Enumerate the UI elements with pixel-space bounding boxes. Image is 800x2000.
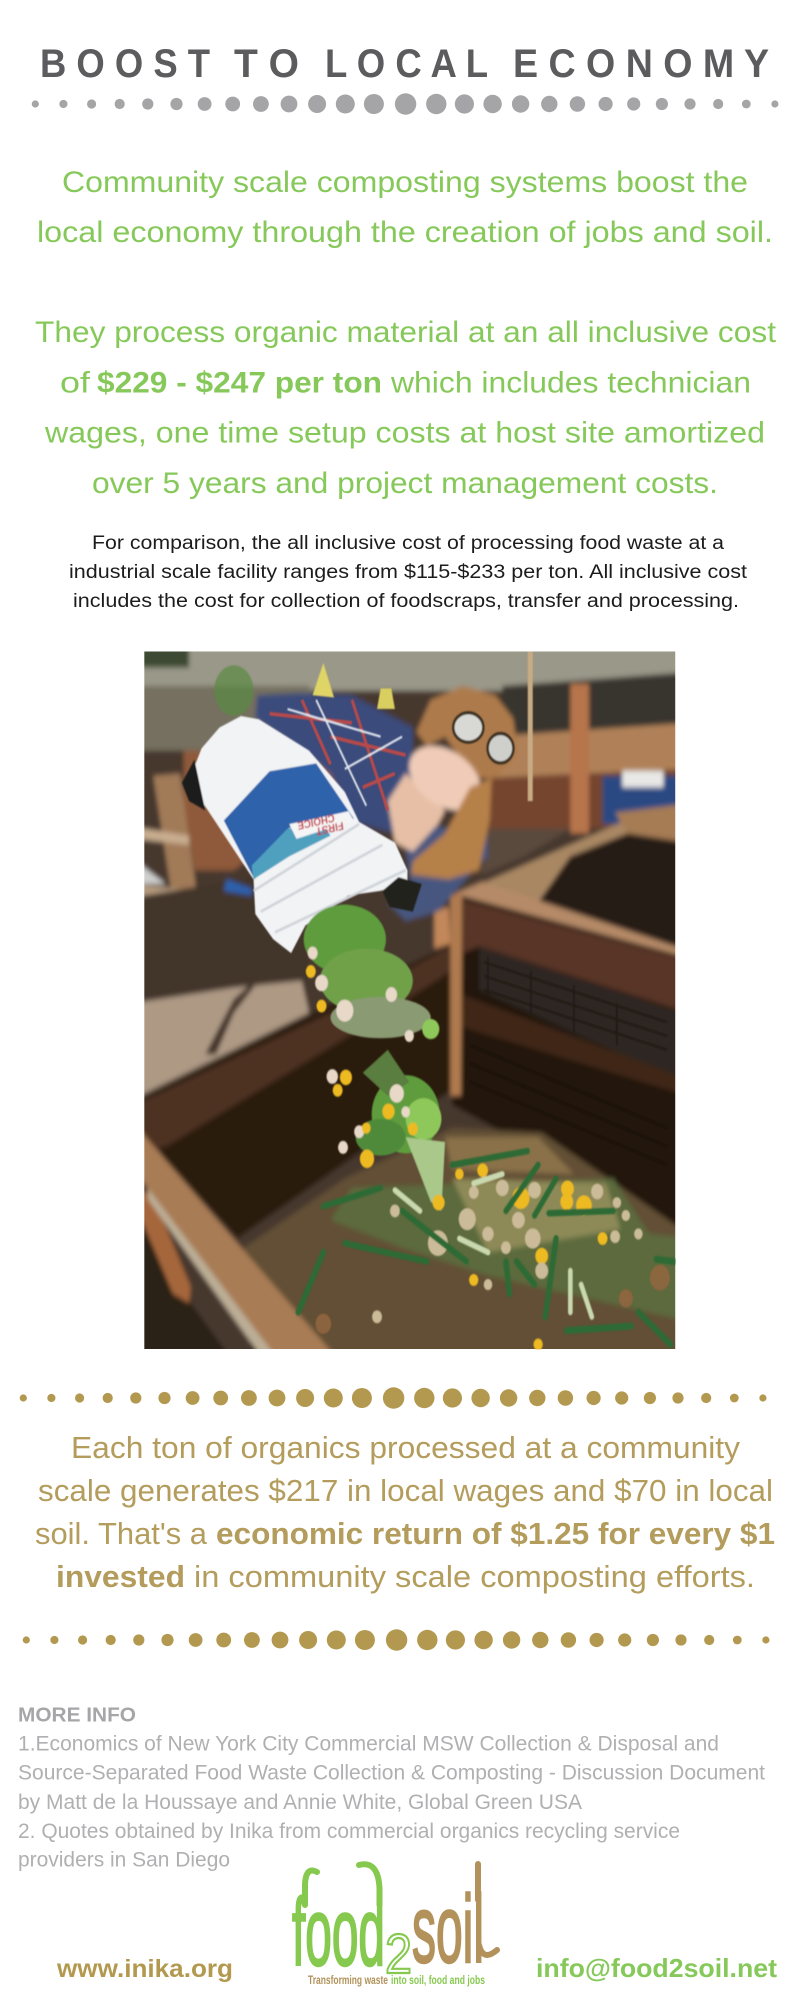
gold dotted divider bottom [23, 1629, 770, 1651]
green intro text [37, 166, 773, 249]
falling greens [304, 905, 445, 1211]
photo: person pouring food scraps from a bucket into a compost bin [144, 652, 676, 1350]
comparison text: industrial scale facility ranges from $115-$233 per ton. All inclusive cost [69, 562, 748, 583]
bucket: FIRST [315, 819, 344, 837]
title: E C O N O M Y [513, 42, 769, 86]
bucket [182, 652, 674, 1350]
comparison text: For comparison, the all inclusive cost of processing food waste at a [92, 533, 724, 554]
green intro text: local economy through the creation of jobs and soil. [37, 216, 773, 249]
green cost text: over 5 years and project management costs. [92, 467, 718, 500]
source list: providers in San Diego [18, 1848, 230, 1872]
title: T O [234, 42, 299, 86]
gold return text: in community scale composting efforts. [194, 1559, 755, 1594]
website link: www.inika.org [56, 1955, 233, 1983]
green cost text [35, 316, 777, 500]
title [40, 42, 769, 86]
green cost text: They process organic material at an all inclusive cost [35, 316, 777, 349]
source list [18, 1732, 765, 1872]
green cost text: which includes technician [390, 366, 751, 400]
gold return text: soil. That's a [35, 1516, 208, 1551]
green cost text: wages, one time setup costs at host site amortized [44, 416, 765, 450]
source list: 1.Economics of New York City Commercial MSW Collection & Disposal and [18, 1732, 719, 1756]
title: B O O S T [40, 42, 210, 86]
source list: 2. Quotes obtained by Inika from commercial organics recycling service [18, 1820, 680, 1843]
logo numeral 2: 2 [385, 1922, 412, 1985]
gold return text: invested [56, 1559, 185, 1594]
comparison text [69, 533, 748, 612]
gray dotted divider [32, 93, 779, 115]
gold return text: economic return of $1.25 for every $1 [216, 1516, 775, 1551]
logo hooks on f and d [305, 1864, 380, 1905]
gold return text: Each ton of organics processed at a community [71, 1430, 741, 1465]
comparison text: includes the cost for collection of foodscraps, transfer and processing. [73, 591, 739, 612]
logo l extension [478, 1864, 497, 1955]
logo tagline: Transforming waste [308, 1973, 388, 1987]
logo tagline [308, 1973, 485, 1987]
source list: Source-Separated Food Waste Collection & Composting - Discussion Document [18, 1762, 765, 1784]
title: L O C A L [325, 42, 488, 86]
bucket: CHOICE [297, 811, 335, 831]
food2soil logo: soil [412, 1876, 484, 1983]
gold return text [35, 1430, 775, 1594]
more info sources [18, 1704, 765, 1872]
gold return text: scale generates $217 in local wages and $70 in local [38, 1473, 773, 1508]
gold dotted divider top [20, 1387, 767, 1409]
green cost text: $229 - $247 per ton [97, 366, 382, 400]
source list: by Matt de la Houssaye and Annie White, Global Green USA [18, 1791, 582, 1814]
logo tagline: into soil, food and jobs [391, 1973, 485, 1987]
food2soil logo: food [292, 1879, 385, 1986]
green intro text: Community scale composting systems boost the [62, 166, 748, 199]
more info heading: MORE INFO [18, 1704, 136, 1726]
email link: info@food2soil.net [536, 1953, 777, 1983]
green cost text: of [60, 366, 91, 400]
